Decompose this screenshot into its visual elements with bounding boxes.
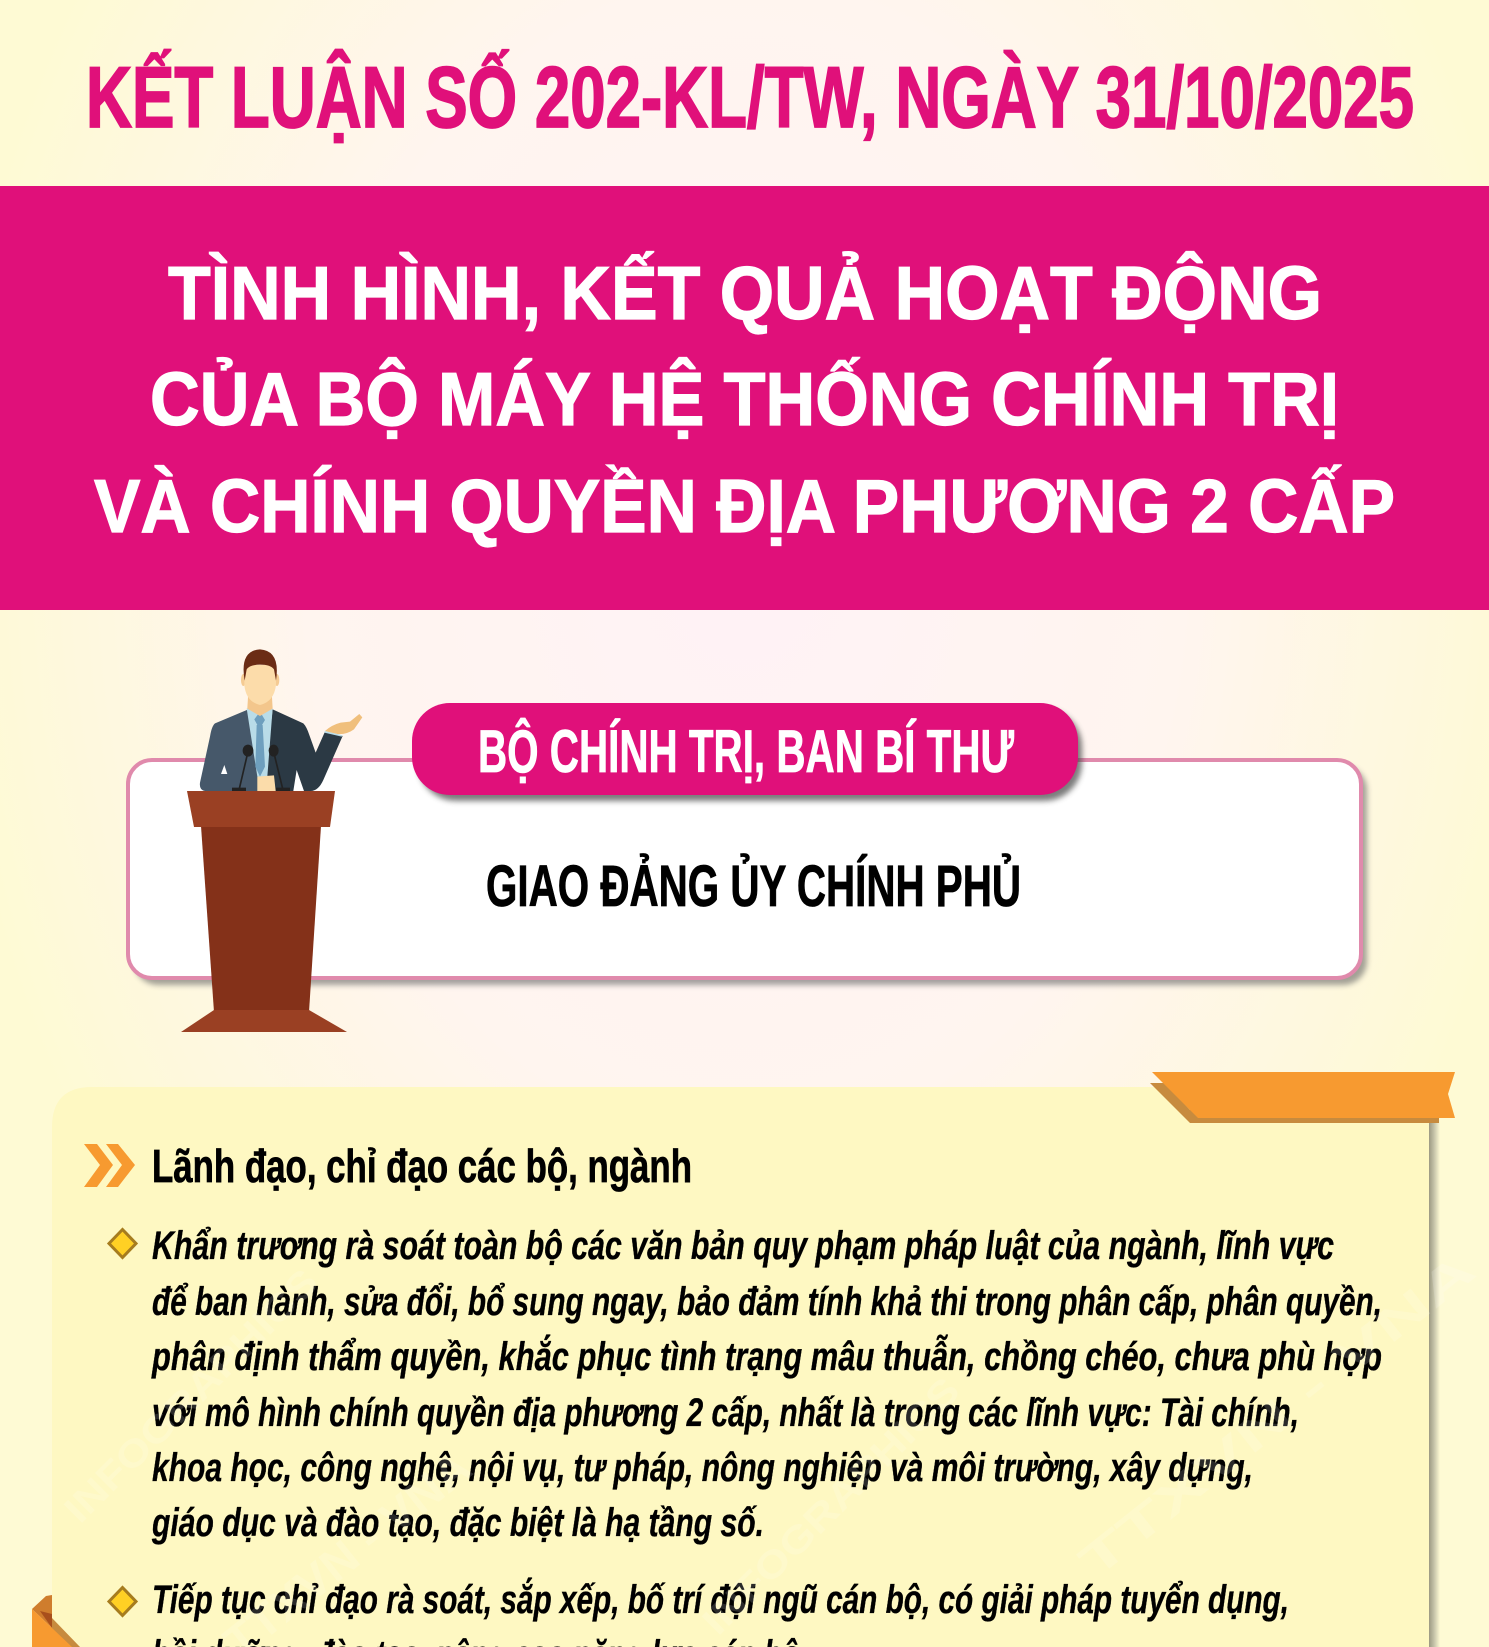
bullet paragraph 2 (109, 1576, 1289, 1647)
panel: white assignment box (128, 760, 1367, 985)
panel: pink headline banner: VÀ CHÍNH QUYỀN ĐỊA PHƯƠNG 2 CẤP (94, 464, 1395, 548)
ribbon: bottom left orange (32, 1595, 80, 1647)
pill heading: BỘ CHÍNH TRỊ, BAN BÍ THƯ (478, 718, 1014, 785)
ribbon: top right orange (1150, 1072, 1455, 1123)
icon: diamond bullet (109, 1588, 136, 1616)
bullet paragraph 1: giáo dục và đào tạo, đặc biệt là hạ tầng số. (151, 1501, 764, 1545)
section heading: Lãnh đạo, chỉ đạo các bộ, ngành (152, 1140, 692, 1192)
watermark (57, 1242, 1485, 1647)
icon: speaker at podium (181, 649, 362, 1032)
watermark: INFOGRAPHICS (57, 1261, 327, 1531)
watermark: TTXVN - VNA (1069, 1242, 1485, 1588)
icon: double chevron (84, 1144, 135, 1187)
icon: diamond bullet (109, 1230, 136, 1258)
bullet paragraph 1 (109, 1224, 1382, 1545)
panel: yellow content panel (52, 1087, 1440, 1647)
panel: pink headline banner: CỦA BỘ MÁY HỆ THỐNG CHÍNH TRỊ (150, 357, 1339, 441)
panel: pink headline banner: TÌNH HÌNH, KẾT QUẢ HOẠT ĐỘNG (168, 251, 1322, 335)
section heading (84, 1140, 692, 1192)
panel: white assignment box: GIAO ĐẢNG ỦY CHÍNH PHỦ (486, 854, 1021, 919)
panel: pink headline banner (0, 186, 1489, 610)
pill heading (412, 703, 1082, 801)
watermark: INFOGRAPHICS (695, 1370, 968, 1643)
